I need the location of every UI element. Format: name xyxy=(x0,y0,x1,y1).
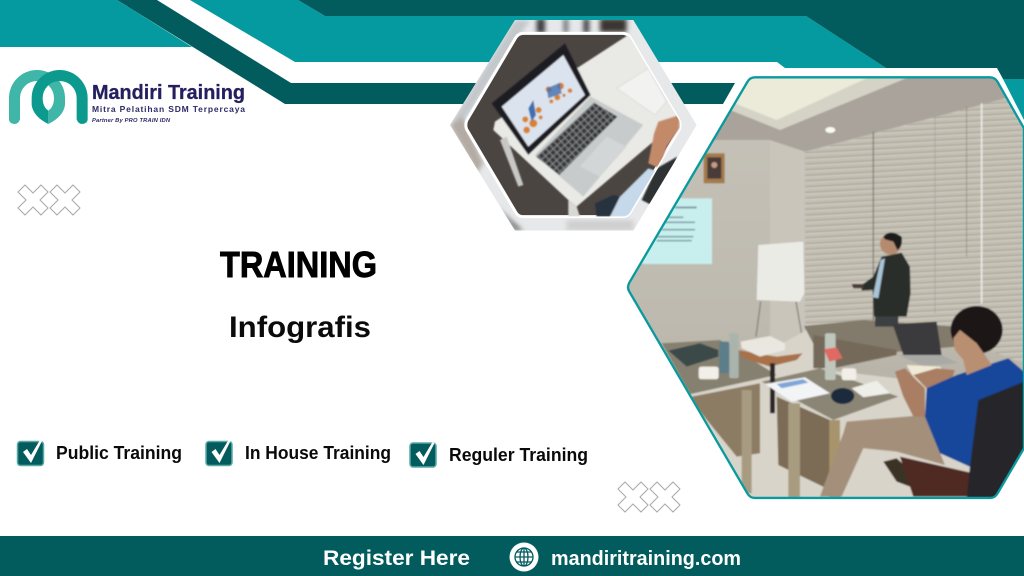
seated man xyxy=(820,306,1024,498)
wall corner band xyxy=(770,220,805,342)
notebook xyxy=(907,365,948,383)
charts on screen xyxy=(522,83,572,133)
teal block centre xyxy=(190,0,886,68)
item: public training xyxy=(18,440,182,466)
ceiling lamp xyxy=(825,127,835,133)
footer bar xyxy=(0,536,1024,576)
decorative crosses bottom right xyxy=(618,482,680,512)
inner white-framed photo xyxy=(466,33,680,217)
projector table xyxy=(737,350,803,367)
desk surface xyxy=(493,33,687,207)
projected slide xyxy=(640,198,712,264)
laptop screen frame xyxy=(492,43,591,155)
outer blurred ring xyxy=(447,17,700,233)
calculator xyxy=(642,157,677,208)
forearm xyxy=(895,368,925,417)
projector xyxy=(741,336,785,357)
desk side xyxy=(568,200,580,217)
front desk top xyxy=(762,368,898,420)
left desk top xyxy=(662,340,777,394)
open laptop xyxy=(893,322,942,355)
face and neck xyxy=(953,330,992,375)
keyboard xyxy=(536,103,617,175)
decorative crosses top left xyxy=(18,185,80,215)
back desk xyxy=(804,320,957,353)
logo tagline: Mitra Pelatihan SDM Terpercaya xyxy=(92,104,245,114)
closed laptop on desk xyxy=(668,343,718,367)
title: TRAINING xyxy=(220,244,377,285)
item: in house training: In House Training xyxy=(245,443,391,463)
paper on desk xyxy=(765,377,830,402)
chair seat xyxy=(900,457,973,497)
header band xyxy=(0,0,1024,120)
dark diagonal band xyxy=(117,0,735,104)
photo: laptop hexagon xyxy=(447,17,700,233)
item: in house training xyxy=(206,440,391,466)
floor xyxy=(690,330,971,497)
subtitle: Infografis xyxy=(229,311,371,344)
blue shirt xyxy=(925,358,1024,468)
flip chart xyxy=(757,242,804,302)
hand xyxy=(648,115,679,168)
icon: globe xyxy=(510,542,538,572)
logo name: Mandiri Training xyxy=(92,82,245,104)
trackpad xyxy=(580,137,627,177)
item: reguler training: Reguler Training xyxy=(449,445,588,465)
ceiling light recess xyxy=(735,77,870,120)
photo: training room hexagon xyxy=(620,73,1024,500)
logo partner line: Partner By PRO TRAIN IDN xyxy=(92,118,171,124)
website url: mandiritraining.com xyxy=(551,548,741,570)
logo xyxy=(9,70,245,124)
item: reguler training xyxy=(410,442,588,467)
paper xyxy=(620,70,665,113)
teal block left xyxy=(0,0,192,47)
logo mark xyxy=(9,70,88,124)
ceiling trim xyxy=(730,77,910,130)
bottles and cups xyxy=(719,342,729,373)
wall portrait xyxy=(704,153,725,183)
hair xyxy=(951,306,1003,354)
ceiling xyxy=(714,78,1006,152)
laptop screen xyxy=(502,55,585,147)
sleeve xyxy=(610,168,658,217)
cap xyxy=(831,388,854,404)
trousers xyxy=(820,415,945,497)
shoe xyxy=(883,458,913,487)
register here label: Register Here xyxy=(323,547,470,570)
chair back xyxy=(967,382,1024,498)
hexagon outline xyxy=(628,77,1024,498)
wall xyxy=(629,105,1023,389)
item: public training: Public Training xyxy=(56,443,182,463)
laptop base xyxy=(535,97,643,197)
checklist xyxy=(18,440,588,467)
teal corner right xyxy=(1003,79,1024,120)
left desk panel xyxy=(692,383,760,457)
window blinds xyxy=(805,93,1024,363)
presenter xyxy=(852,232,911,327)
dark trousers xyxy=(595,195,620,217)
dark top band xyxy=(298,0,1024,79)
